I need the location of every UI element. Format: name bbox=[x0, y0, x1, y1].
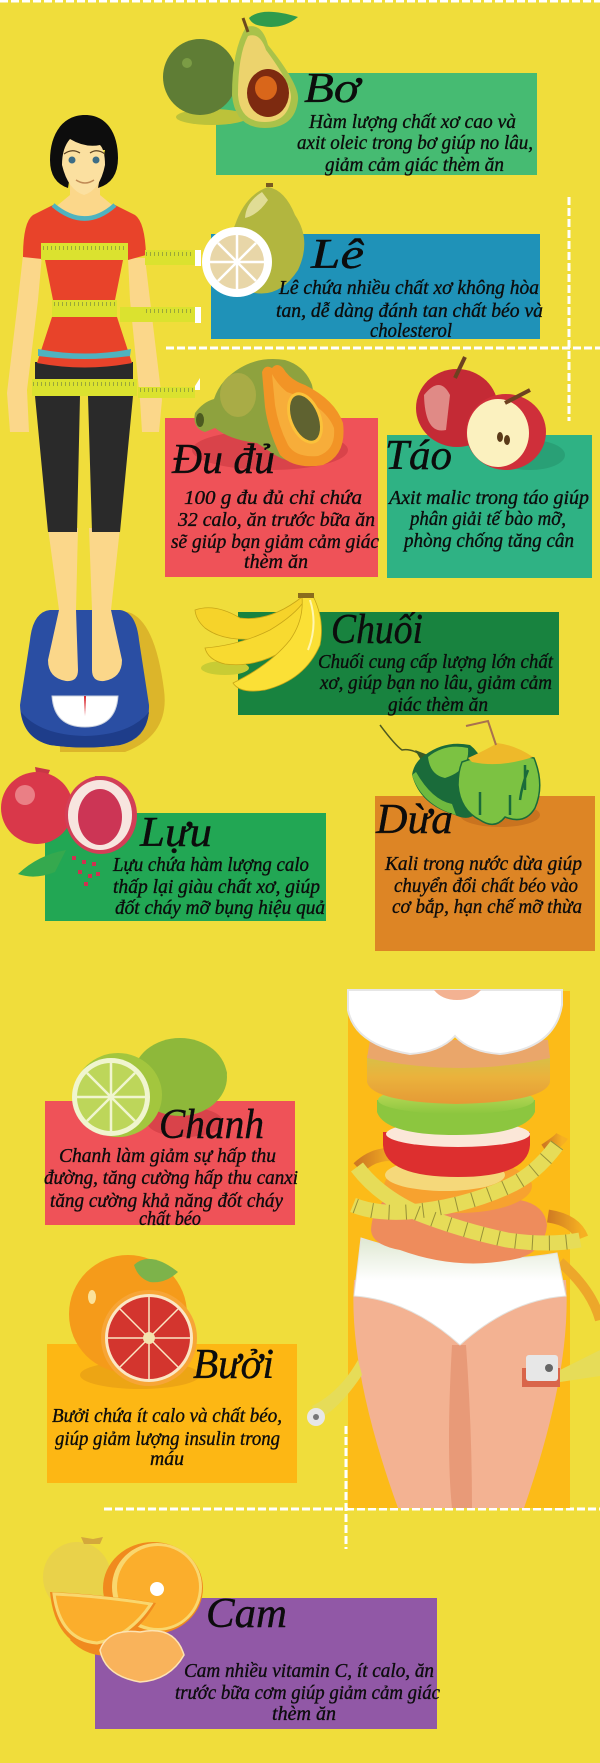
text: Chanh description: tăng cường khả năng đốt cháy bbox=[50, 1190, 283, 1212]
icon: papaya bbox=[192, 359, 348, 470]
text: Dừa description: chuyển đổi chất béo vào bbox=[394, 875, 578, 897]
hair bbox=[50, 115, 118, 188]
text: Cam description: trước bữa cơm giúp giảm cảm giác bbox=[175, 1682, 440, 1704]
heading: Lê: Lê bbox=[310, 232, 364, 278]
shirt bbox=[23, 205, 146, 300]
measuring tapes bbox=[32, 243, 201, 398]
icon: lime bbox=[72, 1038, 227, 1137]
text: Cam description: thèm ăn bbox=[272, 1703, 336, 1725]
text: Chuối description: giác thèm ăn bbox=[388, 694, 488, 716]
scale bbox=[20, 610, 165, 752]
legs bbox=[48, 528, 122, 681]
back of tape loops bbox=[358, 1136, 582, 1238]
text: Bưởi description bbox=[52, 1405, 282, 1470]
panel: Dừa bbox=[375, 721, 595, 951]
text: Cam description: Cam nhiều vitamin C, ít calo, ăn bbox=[184, 1660, 434, 1682]
text: Bơ description: axit oleic trong bơ giúp no lâu, bbox=[297, 132, 533, 154]
text: Chanh description bbox=[44, 1145, 298, 1230]
heading: Chuối: Chuối bbox=[331, 607, 423, 653]
text: Táo description: phân giải tế bào mỡ, bbox=[408, 508, 566, 530]
text: Lựu description: đốt cháy mỡ bụng hiệu quả bbox=[115, 897, 325, 919]
text: Bưởi description: Bưởi chứa ít calo và chất béo, bbox=[52, 1405, 282, 1427]
icon: grapefruit bbox=[69, 1255, 200, 1389]
text: Lê description: Lê chứa nhiều chất xơ không hòa bbox=[278, 277, 539, 299]
white top bbox=[348, 990, 562, 1054]
fruit slices bbox=[371, 1200, 547, 1263]
text: Đu đủ description: thèm ăn bbox=[244, 551, 308, 573]
text: Bơ description: giảm cảm giác thèm ăn bbox=[325, 154, 504, 176]
panel: Táo bbox=[385, 357, 592, 578]
icon: bananas bbox=[195, 593, 321, 691]
text: Chanh description: chất béo bbox=[139, 1208, 201, 1230]
text: Táo description bbox=[387, 487, 589, 552]
text: Chuối description: Chuối cung cấp lượng lớn chất bbox=[318, 651, 553, 673]
icon: coconut bbox=[380, 721, 540, 827]
text: Bưởi description: máu bbox=[150, 1448, 184, 1470]
neck bbox=[53, 180, 117, 218]
heading: Bơ: Bơ bbox=[304, 66, 363, 112]
text: Đu đủ description bbox=[171, 487, 379, 573]
text: Chuối description: xơ, giúp bạn no lâu, giảm cảm bbox=[319, 672, 552, 694]
text: Táo description: phòng chống tăng cân bbox=[402, 530, 574, 552]
heading: Đu đủ: Đu đủ bbox=[171, 437, 275, 483]
text: Chanh description: Chanh làm giảm sự hấp thu bbox=[59, 1145, 276, 1167]
panel: Bơ bbox=[163, 12, 537, 176]
text: Chuối description bbox=[318, 651, 553, 716]
panel: Bưởi bbox=[47, 1255, 297, 1483]
underwear bbox=[354, 1238, 566, 1345]
icon: avocado bbox=[163, 12, 298, 128]
text: Dừa description: cơ bắp, hạn chế mỡ thừa bbox=[392, 896, 582, 918]
icon: pear bbox=[202, 183, 304, 297]
text: Bưởi description: giúp giảm lượng insulin trong bbox=[55, 1428, 280, 1450]
icon: pomegranate bbox=[1, 767, 137, 886]
text: Dừa description bbox=[384, 853, 582, 918]
heading: Lựu: Lựu bbox=[139, 810, 212, 856]
heading: Chanh: Chanh bbox=[159, 1102, 264, 1148]
tape end left bbox=[312, 1360, 362, 1420]
heading: Cam: Cam bbox=[206, 1591, 287, 1637]
text: Cam description bbox=[175, 1660, 440, 1725]
arms bbox=[7, 255, 162, 432]
text: Đu đủ description: sẽ giúp bạn giảm cảm giác bbox=[171, 531, 379, 553]
panel: Cam bbox=[43, 1537, 440, 1729]
text: Lựu description: thấp lại giàu chất xơ, giúp bbox=[113, 876, 320, 898]
panel: Lê bbox=[202, 183, 543, 342]
heading: Dừa: Dừa bbox=[375, 797, 453, 843]
icon: apple bbox=[416, 357, 565, 470]
tape end right bbox=[560, 1350, 600, 1382]
panel: Chuối bbox=[195, 593, 559, 716]
measuring tape around waist bbox=[353, 1145, 580, 1243]
text: Bơ description: Hàm lượng chất xơ cao và bbox=[308, 111, 516, 133]
panel: Chanh bbox=[44, 1038, 298, 1230]
text: Lê description: cholesterol bbox=[370, 320, 452, 342]
text: Bơ description bbox=[297, 111, 533, 176]
text: Táo description: Axit malic trong táo giúp bbox=[387, 487, 589, 509]
icon: oranges bbox=[43, 1537, 203, 1682]
text: Lê description bbox=[276, 277, 543, 342]
illustration: woman standing on scale bbox=[7, 115, 201, 752]
thighs bbox=[353, 1280, 567, 1508]
panel: Đu đủ bbox=[165, 359, 379, 577]
illustration: body made of fruit slices bbox=[307, 990, 600, 1508]
text: Lựu description: Lựu chứa hàm lượng calo bbox=[112, 854, 309, 876]
text: Dừa description: Kali trong nước dừa giúp bbox=[384, 853, 582, 875]
text: Chanh description: đường, tăng cường hấp thu canxi bbox=[44, 1167, 298, 1189]
text: Lựu description bbox=[112, 854, 325, 919]
heading: Bưởi: Bưởi bbox=[193, 1342, 274, 1388]
panel: Lựu bbox=[1, 767, 326, 921]
text: Đu đủ description: 32 calo, ăn trước bữa ăn bbox=[177, 509, 375, 531]
text: Đu đủ description: 100 g đu đủ chỉ chứa bbox=[184, 487, 362, 509]
face bbox=[62, 139, 105, 195]
text: Lê description: tan, dễ dàng đánh tan chất béo và bbox=[276, 300, 543, 322]
leggings bbox=[35, 396, 133, 532]
heading: Táo: Táo bbox=[385, 433, 452, 479]
